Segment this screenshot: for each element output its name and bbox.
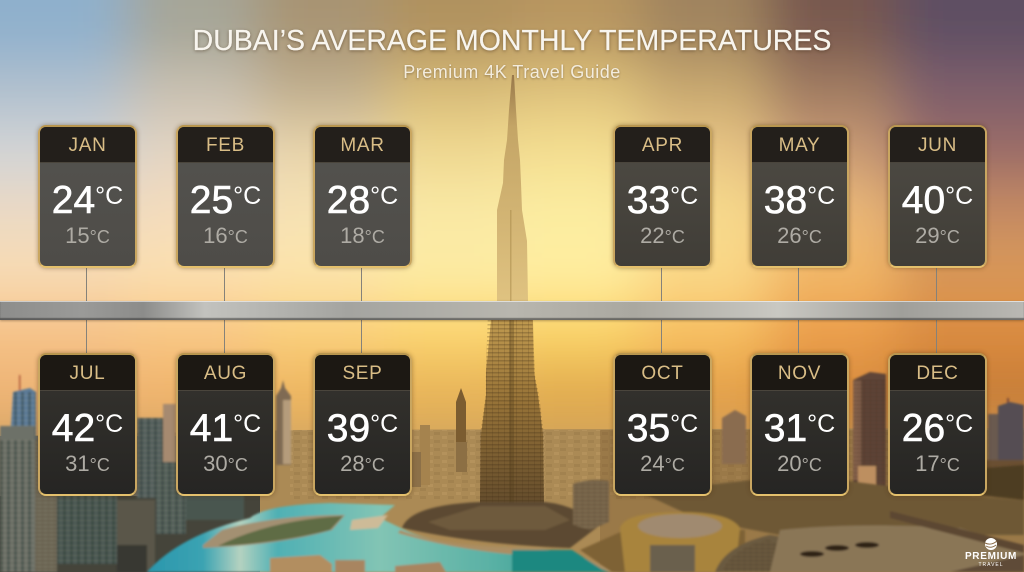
card: December: 17°C bbox=[915, 451, 960, 476]
card: March: MAR bbox=[340, 135, 385, 156]
subtitle: Premium 4K Travel Guide bbox=[403, 62, 621, 82]
card: April bbox=[613, 125, 712, 268]
left towers bbox=[0, 375, 291, 572]
card: January: 15°C bbox=[65, 223, 110, 248]
card: October: 35°C bbox=[627, 407, 698, 450]
card: April: 33°C bbox=[627, 179, 698, 222]
card: October: OCT bbox=[641, 363, 684, 384]
card: December: 26°C bbox=[902, 407, 973, 450]
sky mosaic bbox=[0, 0, 1024, 430]
card: November: 31°C bbox=[764, 407, 835, 450]
card: November bbox=[750, 353, 849, 496]
card: May bbox=[750, 125, 849, 268]
card: April: 22°C bbox=[640, 223, 685, 248]
card: June: 40°C bbox=[902, 179, 973, 222]
card: June: JUN bbox=[918, 135, 957, 156]
card: July: 31°C bbox=[65, 451, 110, 476]
card: May: 26°C bbox=[777, 223, 822, 248]
metal timeline bar bbox=[0, 301, 1024, 320]
card: January bbox=[38, 125, 137, 268]
card: November: NOV bbox=[778, 363, 821, 384]
card: October: 24°C bbox=[640, 451, 685, 476]
right towers bbox=[722, 372, 1024, 496]
logo: Premium Travel bbox=[965, 538, 1017, 568]
card: November: 20°C bbox=[777, 451, 822, 476]
card: December bbox=[888, 353, 987, 496]
card: September: 28°C bbox=[340, 451, 385, 476]
hazy city ground bbox=[0, 428, 1024, 572]
card: May: MAY bbox=[779, 135, 820, 156]
card: February: 16°C bbox=[203, 223, 248, 248]
card: August: 30°C bbox=[203, 451, 248, 476]
title: DUBAI’S AVERAGE MONTHLY TEMPERATURES bbox=[193, 25, 831, 57]
logo: Premium Travel: PREMIUM bbox=[965, 551, 1017, 562]
card: September: SEP bbox=[342, 363, 383, 384]
card: February bbox=[176, 125, 275, 268]
card: March bbox=[313, 125, 412, 268]
card: January: JAN bbox=[68, 135, 106, 156]
connector stems bbox=[86, 268, 937, 353]
card: July: 42°C bbox=[52, 407, 123, 450]
mid towers bbox=[412, 388, 467, 487]
card: March: 18°C bbox=[340, 223, 385, 248]
card: September: 39°C bbox=[327, 407, 398, 450]
card: March: 28°C bbox=[327, 179, 398, 222]
lake and park bbox=[147, 503, 620, 572]
card: February: FEB bbox=[206, 135, 245, 156]
card: July bbox=[38, 353, 137, 496]
card: September bbox=[313, 353, 412, 496]
card: June: 29°C bbox=[915, 223, 960, 248]
card: July: JUL bbox=[70, 363, 105, 384]
mall and roof bbox=[580, 465, 1024, 572]
card: January: 24°C bbox=[52, 179, 123, 222]
card: April: APR bbox=[642, 135, 683, 156]
logo: Premium Travel: TRAVEL bbox=[978, 562, 1004, 568]
card: August: 41°C bbox=[190, 407, 261, 450]
card: May: 38°C bbox=[764, 179, 835, 222]
podium and right mid-rise bbox=[402, 480, 609, 548]
card: February: 25°C bbox=[190, 179, 261, 222]
card: December: DEC bbox=[916, 363, 959, 384]
card: August bbox=[176, 353, 275, 496]
card: August: AUG bbox=[204, 363, 247, 384]
card: June bbox=[888, 125, 987, 268]
card: October bbox=[613, 353, 712, 496]
Burj Khalifa bbox=[480, 75, 544, 505]
